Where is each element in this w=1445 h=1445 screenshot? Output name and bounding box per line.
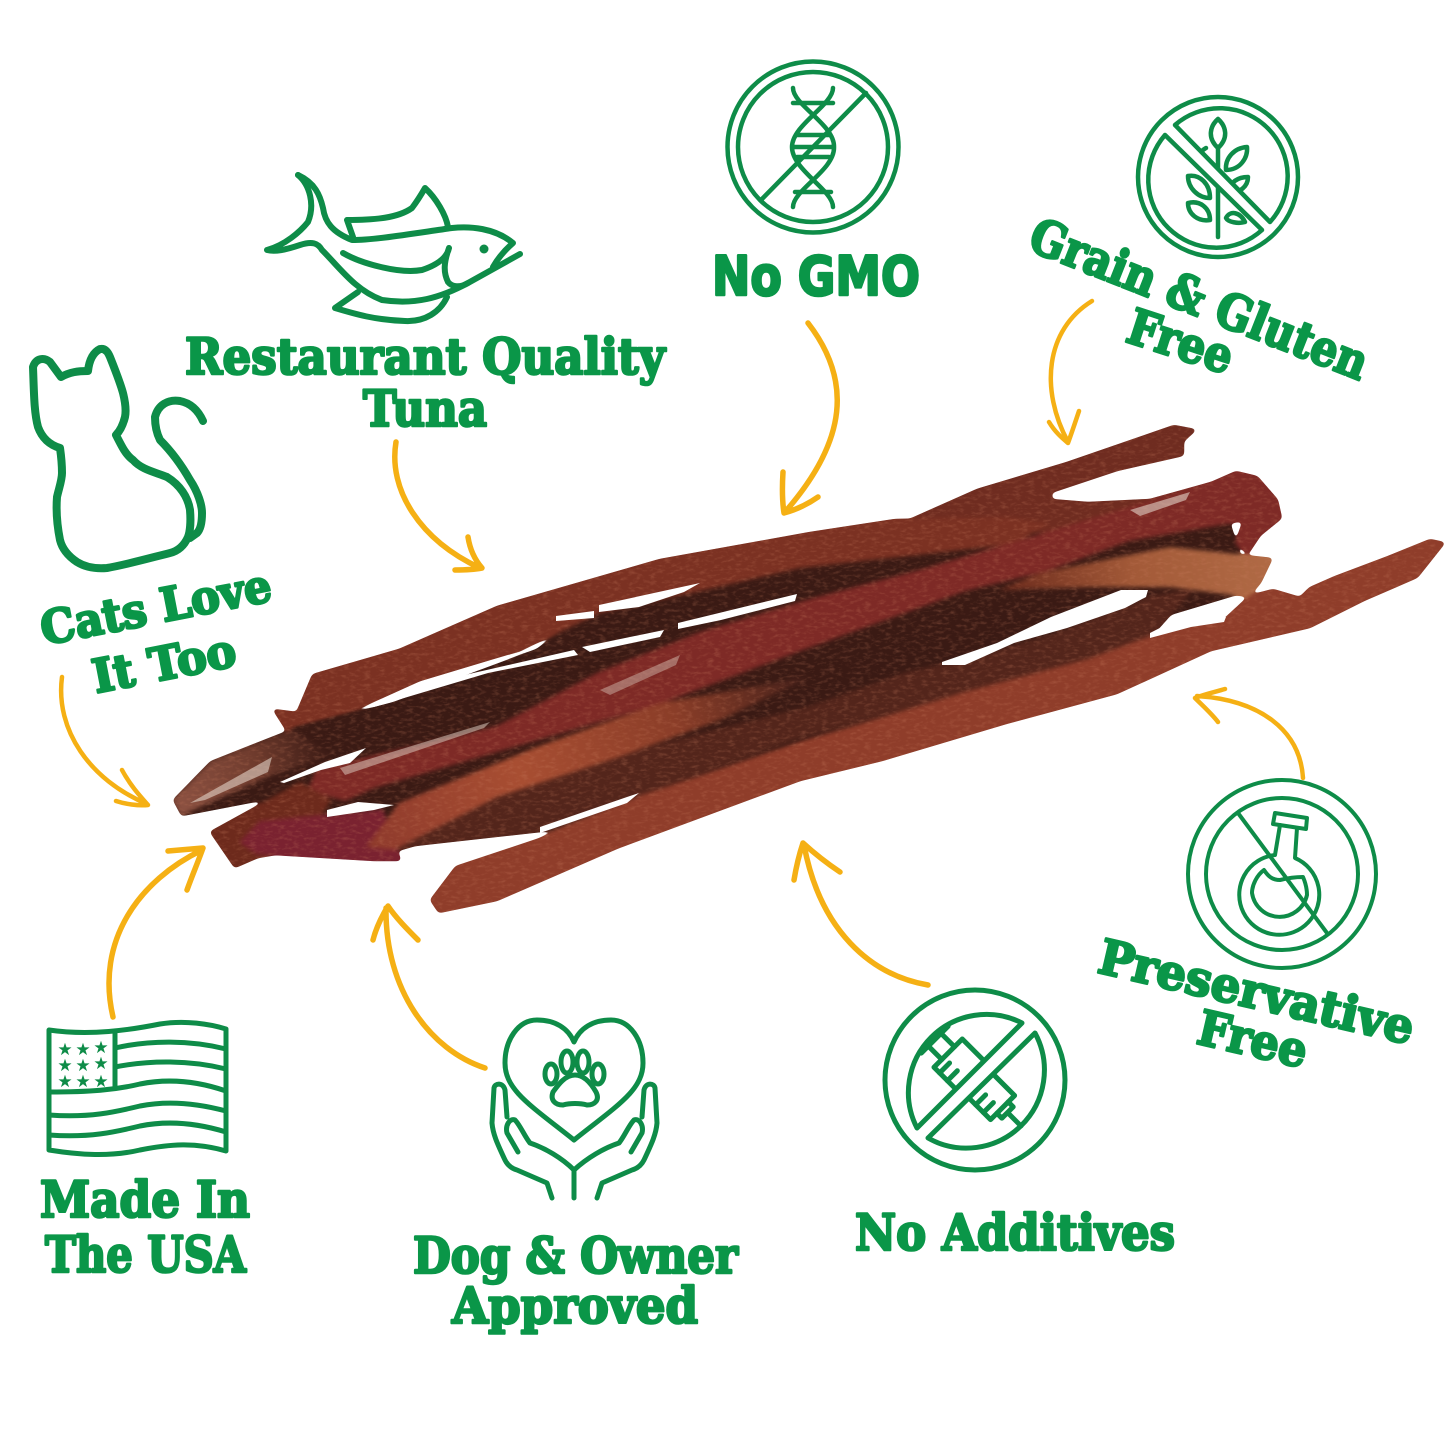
strip: lower dark strand	[374, 590, 1192, 857]
dust highlights	[190, 492, 1190, 803]
arrow: no additives to product	[794, 843, 928, 985]
arrow: tuna to product	[395, 442, 482, 570]
icon: usa flag: ★	[75, 1040, 91, 1060]
icon: usa flag: ★	[57, 1040, 73, 1060]
strip: dark centre mass	[174, 525, 1250, 845]
arrow: dog owner to product	[373, 906, 485, 1068]
icon: usa flag: ★	[93, 1054, 109, 1074]
icon: preservative free flask	[1188, 780, 1376, 968]
heading: cats love it too: Cats Love	[36, 558, 276, 656]
heading: grain and gluten free: Free	[1120, 297, 1241, 386]
strip: tip of dark strand	[174, 730, 333, 815]
icon: no gmo	[728, 62, 898, 232]
icon: usa flag: ★	[93, 1038, 109, 1058]
strip: left red stub	[241, 810, 400, 860]
heading: preservative free: Preservative	[1093, 929, 1420, 1056]
icon: grain free	[1138, 97, 1298, 257]
heading: cats love it too: It Too	[88, 623, 240, 704]
icon: usa flag: ★	[93, 1072, 109, 1092]
heading: dog and owner approved: Approved	[451, 1276, 698, 1335]
heading: restaurant quality tuna	[185, 327, 667, 438]
icon: cat	[33, 349, 203, 568]
heading: dog and owner approved: Dog & Owner	[413, 1226, 739, 1285]
arrow: preservative to product	[1195, 689, 1303, 778]
heading: cats love it too	[36, 558, 276, 704]
arrow: grain free to product	[1049, 301, 1092, 443]
strip: orange cross strand at right	[1000, 547, 1273, 597]
heading: no additives: No Additives	[855, 1203, 1175, 1262]
arrow: cats to product	[61, 677, 148, 805]
icon: fish	[267, 175, 520, 321]
heading: no gmo: No GMO	[712, 245, 920, 308]
strip: thin top back strand	[905, 426, 1230, 560]
arrow: no gmo to product	[782, 323, 837, 513]
arrow: usa to product	[109, 848, 203, 1017]
icon: usa flag	[49, 1022, 226, 1155]
strip: long red strand	[309, 472, 1281, 800]
icon: usa flag: ★	[75, 1056, 91, 1076]
strip: left brown stub	[211, 783, 330, 867]
strip: bottom textured strand with tail	[431, 540, 1444, 912]
icon: heart paw hands	[492, 1020, 657, 1198]
heading: made in the usa	[40, 1170, 250, 1284]
product photo: tuna jerky strips	[174, 426, 1444, 912]
icon: usa flag: ★	[57, 1072, 73, 1092]
heading: dog and owner approved	[413, 1226, 739, 1335]
heading: restaurant quality tuna: Restaurant Quality	[185, 327, 667, 386]
icon: no additives syringe	[885, 990, 1065, 1170]
heading: preservative free: Free	[1192, 1000, 1313, 1080]
strip: top back strand	[274, 518, 1047, 732]
heading: made in the usa: Made In	[40, 1170, 250, 1229]
icon: usa flag: ★	[57, 1056, 73, 1076]
heading: restaurant quality tuna: Tuna	[363, 379, 487, 438]
strip group with soft edges	[174, 426, 1444, 912]
strip: orange front strand	[366, 677, 810, 850]
heading: grain and gluten free: Grain & Gluten	[1022, 206, 1377, 392]
heading: made in the usa: The USA	[45, 1225, 247, 1284]
icon: usa flag: ★	[75, 1072, 91, 1092]
white gaps between strips	[280, 583, 1226, 833]
